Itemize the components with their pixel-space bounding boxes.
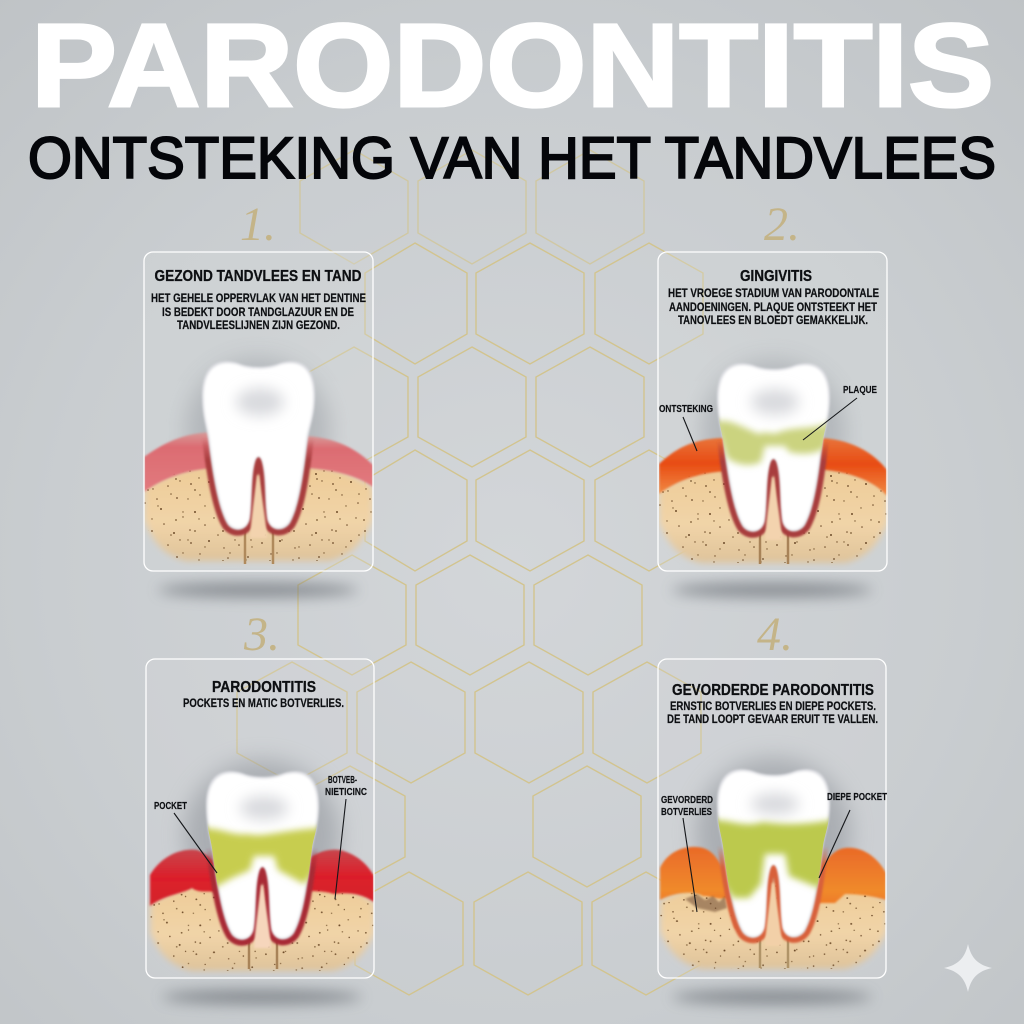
subtitle: ONTSTEKING VAN HET TANDVLEES (28, 126, 996, 191)
honeycomb background (237, 150, 703, 995)
card 1 (144, 252, 373, 571)
card 3 border (146, 659, 374, 978)
card 3 (146, 659, 374, 978)
tooth and gum illustration 4 (660, 758, 887, 969)
panel 3: parodontitis (146, 659, 375, 978)
label: ontsteking: ONTSTEKING (659, 404, 713, 415)
tooth and gum illustration 3 (150, 760, 375, 971)
label: plaque (803, 385, 877, 440)
label: pocket (154, 801, 217, 873)
heading 2: GINGIVITIS (740, 268, 812, 285)
title: PARODONTITIS (31, 0, 994, 132)
step number 1: 1. (240, 198, 276, 251)
description 1: TANDVLEESLIJNEN ZIJN GEZOND. (177, 318, 340, 332)
tooth and gum illustration 1 (144, 358, 373, 564)
label: botvernietiging: NIETICINC (325, 787, 368, 798)
description 2 (668, 286, 879, 327)
label: diepe pocket (819, 792, 888, 878)
card 1 border (144, 252, 373, 571)
card 2 border (658, 252, 887, 571)
panel 1: healthy gum and tooth (144, 252, 373, 571)
label: gevorderd botverlies: GEVORDERD (661, 795, 713, 806)
label: pocket: POCKET (154, 801, 188, 812)
description 1: HET GEHELE OPPERVLAK VAN HET DENTINE (151, 291, 366, 305)
panel shadows (158, 583, 872, 1004)
heading 1: GEZOND TANDVLEES EN TAND (154, 268, 362, 285)
panel 2: gingivitis (658, 252, 888, 571)
label: botvernietiging (325, 775, 368, 899)
panel 4: advanced parodontitis (658, 659, 888, 978)
label: gevorderd botverlies: BOTVERLIES (661, 807, 712, 818)
description 4 (667, 699, 878, 726)
step number 4: 4. (757, 608, 793, 661)
description 2: HET VROEGE STADIUM VAN PARODONTALE (668, 286, 879, 300)
step number 3: 3. (243, 608, 280, 661)
card 4 border (658, 659, 886, 978)
label: botvernietiging: BOTVEB- (328, 775, 357, 786)
description 4: ERNSTIC BOTVERLIES EN DIEPE POCKETS. (670, 699, 876, 713)
heading 4: GEVORDERDE PARODONTITIS (672, 682, 874, 699)
description 3: POCKETS EN MATIC BOTVERLIES. (183, 696, 344, 710)
card 4 (658, 659, 886, 978)
tooth and gum illustration 2 (659, 360, 888, 564)
description 2: TANOVLEES EN BLOEDT GEMAKKELIJK. (678, 313, 868, 327)
description 2: AANDOENINGEN. PLAQUE ONTSTEEKT HET (669, 300, 877, 314)
description 1: IS BEDEKT DOOR TANDGLAZUUR EN DE (162, 305, 354, 319)
step number 2: 2. (764, 198, 800, 251)
icon: sparkle watermark (944, 944, 992, 992)
label: ontsteking (659, 404, 713, 451)
label: diepe pocket: DIEPE POCKET (827, 792, 888, 803)
card 2 (658, 252, 887, 571)
label: plaque: PLAQUE (843, 385, 877, 396)
description 4: DE TAND LOOPT GEVAAR ERUIT TE VALLEN. (667, 712, 878, 726)
heading 3: PARODONTITIS (212, 679, 316, 696)
description 1 (151, 291, 366, 332)
label: gevorderd botverlies (661, 795, 713, 912)
